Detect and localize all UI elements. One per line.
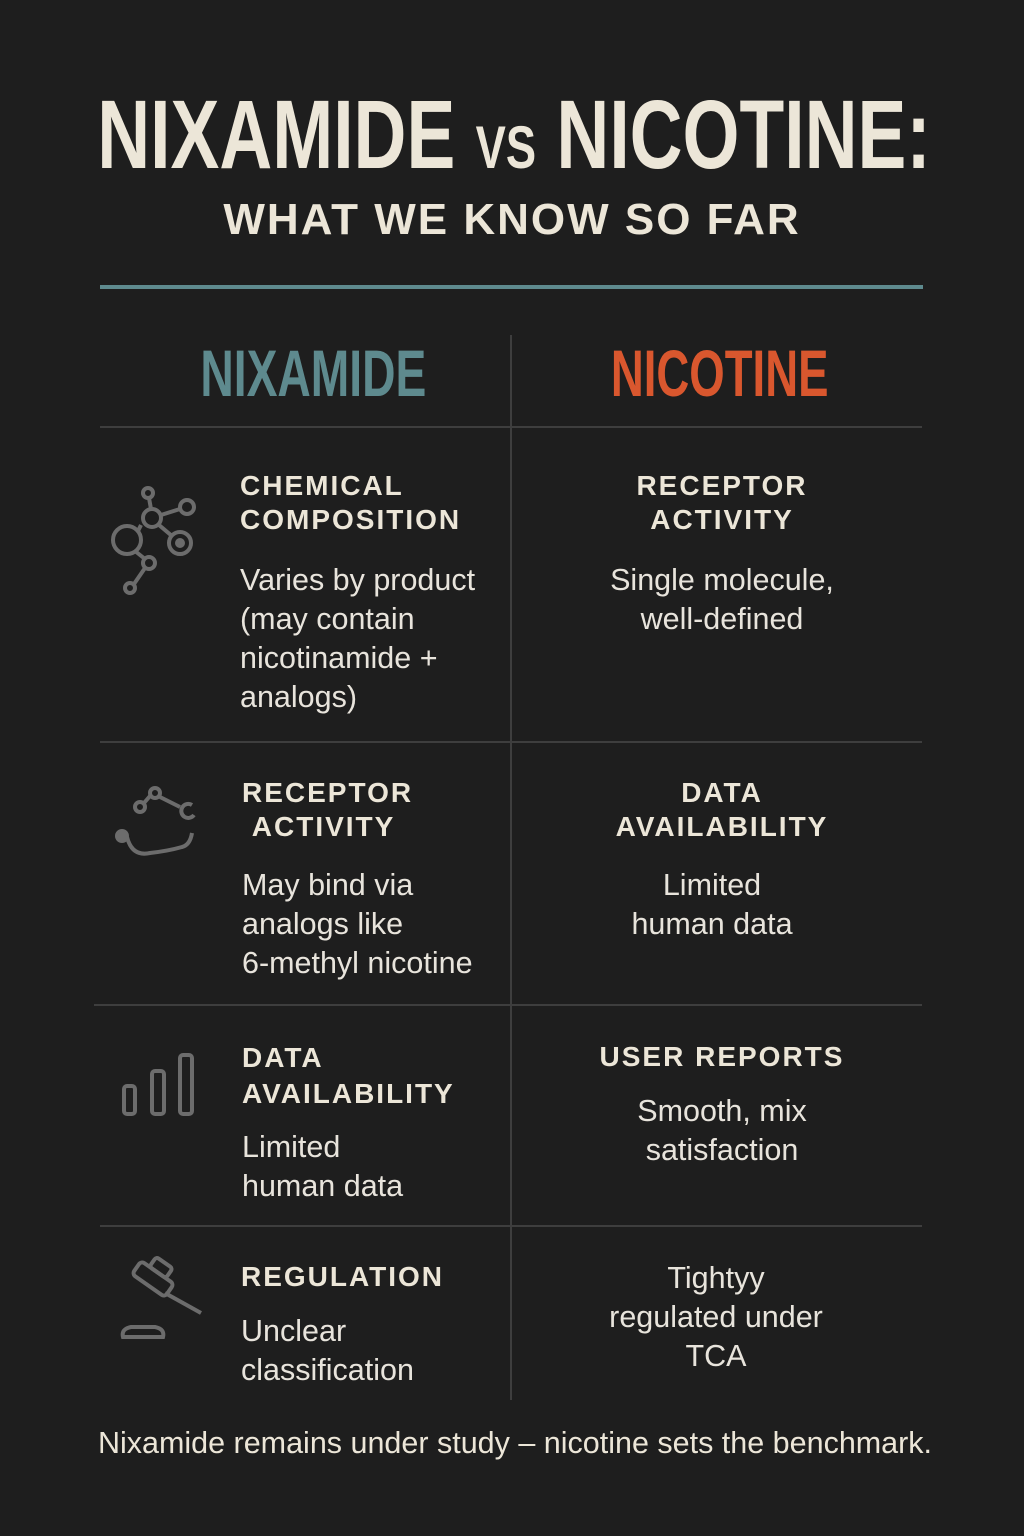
row3 left: human data bbox=[242, 1169, 403, 1203]
row1 left: CHEMICAL bbox=[240, 470, 404, 501]
row1 right: ACTIVITY bbox=[650, 504, 794, 535]
row4 right: Tightyy bbox=[667, 1261, 765, 1295]
title: NIXAMIDE VS NICOTINE: bbox=[97, 80, 931, 189]
row3 left: DATA bbox=[242, 1042, 324, 1073]
row3 left: Limited bbox=[242, 1130, 340, 1164]
icon: receptor bbox=[115, 786, 196, 856]
row3 right: USER REPORTS bbox=[600, 1041, 844, 1072]
icon: molecule bbox=[111, 486, 196, 595]
row1 right bbox=[610, 470, 834, 636]
row2 right bbox=[616, 777, 828, 941]
row1 left: Varies by product bbox=[240, 563, 475, 597]
row3 left: AVAILABILITY bbox=[242, 1078, 455, 1109]
icon: gavel bbox=[120, 1256, 202, 1339]
row2 left: ACTIVITY bbox=[252, 811, 395, 842]
row2 left: RECEPTOR bbox=[242, 777, 413, 808]
row2 left: analogs like bbox=[242, 907, 403, 941]
footer: Nixamide remains under study – nicotine sets the benchmark. bbox=[98, 1426, 932, 1460]
row2 left: May bind via bbox=[242, 868, 413, 902]
row1 left bbox=[240, 470, 475, 714]
row3 right bbox=[600, 1041, 844, 1167]
row4 right: TCA bbox=[686, 1339, 746, 1373]
row1 left: COMPOSITION bbox=[240, 504, 461, 535]
row1 left: analogs) bbox=[240, 680, 357, 714]
row4 left: REGULATION bbox=[241, 1261, 444, 1292]
row4 right: regulated under bbox=[609, 1300, 823, 1334]
row1 right: RECEPTOR bbox=[636, 470, 808, 501]
row2 right: Limited bbox=[663, 868, 761, 902]
row2 left: 6-methyl nicotine bbox=[242, 946, 473, 980]
row2 left bbox=[242, 777, 473, 980]
row1 left: (may contain bbox=[240, 602, 415, 636]
row1 right: Single molecule, bbox=[610, 563, 834, 597]
row3 right: satisfaction bbox=[646, 1133, 798, 1167]
row1 left: nicotinamide + bbox=[240, 641, 438, 675]
row2 right: human data bbox=[631, 907, 793, 941]
row4 left bbox=[241, 1261, 444, 1387]
row2 right: DATA bbox=[681, 777, 763, 808]
column header: nicotine: NICOTINE bbox=[611, 336, 829, 410]
row2 right: AVAILABILITY bbox=[616, 811, 828, 842]
subtitle: WHAT WE KNOW SO FAR bbox=[223, 195, 801, 244]
row3 left bbox=[242, 1042, 455, 1203]
row4 right bbox=[609, 1261, 823, 1373]
row3 right: Smooth, mix bbox=[637, 1094, 807, 1128]
column header: nixamide: NIXAMIDE bbox=[200, 336, 426, 410]
icon: bar chart bbox=[122, 1053, 194, 1116]
row4 left: Unclear bbox=[241, 1314, 346, 1348]
row1 right: well-defined bbox=[641, 602, 803, 636]
row4 left: classification bbox=[241, 1353, 414, 1387]
